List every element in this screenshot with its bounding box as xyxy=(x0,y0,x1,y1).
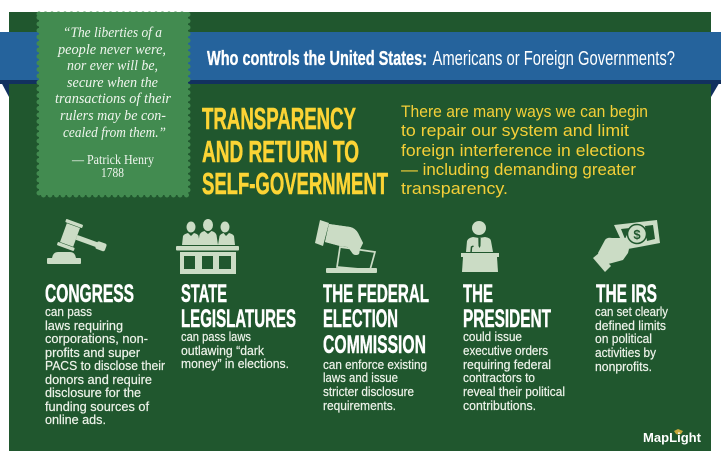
body: The IRS: nonprofits. xyxy=(595,360,652,374)
body: The President: executive orders xyxy=(463,344,548,358)
body: The IRS: on political xyxy=(595,332,652,346)
heading: Federal Election Commission: COMMISSION xyxy=(323,331,426,359)
ribbon title text: Who controls the United States: xyxy=(207,48,427,70)
body: The President xyxy=(463,330,565,413)
heading: State Legislatures xyxy=(181,280,296,333)
icon: legislators at desk xyxy=(176,219,239,274)
column: The President xyxy=(463,280,565,413)
icon: president at podium xyxy=(461,221,499,272)
body: The President: contributions. xyxy=(463,399,536,413)
body: Congress xyxy=(45,305,165,427)
quote text xyxy=(55,25,171,141)
body: Federal Election Commission: requirements. xyxy=(323,399,396,413)
quote attribution: 1788 xyxy=(101,166,124,181)
main heading xyxy=(202,101,388,201)
body: Congress: PACS to disclose their xyxy=(45,359,165,373)
body: State Legislatures: can pass laws xyxy=(181,330,251,344)
body: The IRS: can set clearly xyxy=(595,305,669,319)
main heading: TRANSPARENCY xyxy=(202,101,356,136)
body: Congress: donors and require xyxy=(45,373,152,387)
intro paragraph: — including demanding greater xyxy=(401,160,636,179)
quote text: secure when the xyxy=(67,75,159,91)
body: Federal Election Commission: can enforce existing xyxy=(323,358,427,372)
icon: hand holding money xyxy=(593,220,660,272)
heading: Federal Election Commission: ELECTION xyxy=(323,305,398,333)
heading: Congress: CONGRESS xyxy=(45,280,134,308)
body: Congress: profits and super xyxy=(45,346,140,360)
body: Congress: can pass xyxy=(45,305,92,319)
icon: hand casting ballot xyxy=(315,220,377,273)
intro paragraph xyxy=(401,102,648,198)
quote text: cealed from them.” xyxy=(63,125,166,141)
intro paragraph: transparency. xyxy=(401,179,508,198)
quote text: people never were, xyxy=(57,42,166,58)
body: Congress: corporations, non- xyxy=(45,332,148,346)
intro paragraph: foreign interference in elections xyxy=(401,141,645,160)
body: Federal Election Commission: laws and issue xyxy=(323,371,398,385)
quote attribution: — Patrick Henry xyxy=(71,153,154,168)
body: State Legislatures xyxy=(181,330,289,371)
body: State Legislatures: money” in elections. xyxy=(181,357,289,371)
heading: The IRS: THE IRS xyxy=(596,280,657,308)
column: Federal Election Commission xyxy=(323,280,429,413)
body: The IRS: activities by xyxy=(595,346,657,360)
body: State Legislatures: outlawing “dark xyxy=(181,344,265,358)
ribbon title text xyxy=(207,48,675,70)
heading: The President xyxy=(463,280,551,333)
heading: The President: THE xyxy=(463,280,493,308)
icon: hand holding money: $ xyxy=(633,227,641,242)
body: Federal Election Commission: stricter disclosure xyxy=(323,385,414,399)
main heading: AND RETURN TO xyxy=(202,134,359,169)
body: The President: could issue xyxy=(463,330,522,344)
quote text: nor ever will be, xyxy=(67,58,158,74)
quote text: rulers may be con- xyxy=(60,108,166,124)
heading: Federal Election Commission xyxy=(323,280,429,359)
body: Congress: laws requiring xyxy=(45,319,123,333)
quote attribution xyxy=(71,153,154,181)
logo: MapLight: MapLight xyxy=(643,431,702,445)
heading: The President: PRESIDENT xyxy=(463,305,551,333)
intro paragraph: There are many ways we can begin xyxy=(401,102,648,121)
body: Congress: online ads. xyxy=(45,413,106,427)
main heading: SELF-GOVERNMENT xyxy=(202,166,388,201)
body: Congress: disclosure for the xyxy=(45,386,141,400)
heading: Federal Election Commission: THE FEDERAL xyxy=(323,280,429,308)
body: The President: reveal their political xyxy=(463,385,565,399)
body: The President: requiring federal xyxy=(463,358,551,372)
heading: State Legislatures: STATE xyxy=(181,280,227,308)
body: The IRS xyxy=(595,305,669,374)
quote text: “The liberties of a xyxy=(63,25,162,41)
body: Federal Election Commission xyxy=(323,358,427,413)
column: State Legislatures xyxy=(181,280,296,371)
column: The IRS xyxy=(595,280,669,374)
column: Congress xyxy=(45,280,165,427)
body: The IRS: defined limits xyxy=(595,319,666,333)
icon: gavel xyxy=(47,219,110,264)
blue title ribbon xyxy=(0,32,721,97)
quote text: transactions of their xyxy=(55,91,171,107)
panel: quote xyxy=(39,12,188,195)
body: The President: contractors to xyxy=(463,371,535,385)
heading: State Legislatures: LEGISLATURES xyxy=(181,305,296,333)
body: Congress: funding sources of xyxy=(45,400,150,414)
intro paragraph: to repair our system and limit xyxy=(401,121,629,140)
